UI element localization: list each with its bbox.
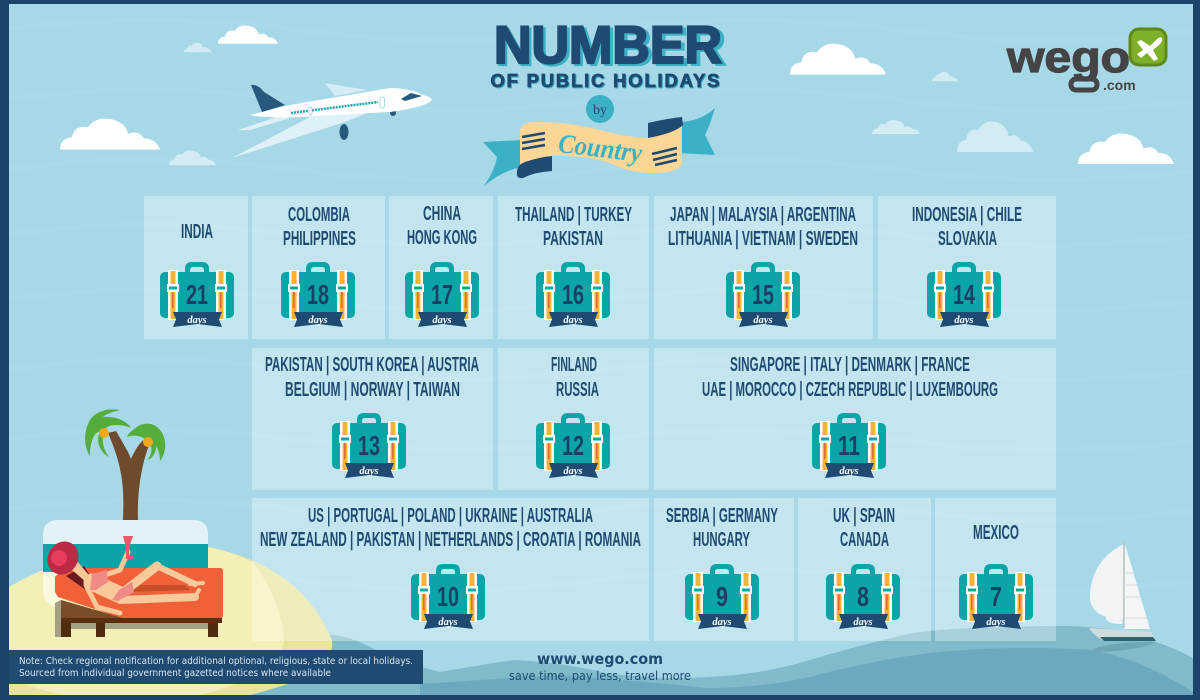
country labels: [181, 203, 1022, 551]
website and tagline: www.wego.com: [537, 650, 663, 668]
suitcase: 7 days: 7: [990, 581, 1002, 612]
note box: Sourced from individual government gazetted notices where available: [19, 668, 331, 679]
suitcase: 14 days: 14: [953, 279, 975, 310]
suitcase: 13 days: days: [359, 466, 379, 477]
country labels: INDIA: [181, 221, 213, 243]
suitcase: 13 days: 13: [358, 430, 380, 461]
country labels: NEW ZEALAND | PAKISTAN | NETHERLANDS | CROATIA | ROMANIA: [260, 529, 641, 551]
suitcase: 18 days: 18: [307, 279, 329, 310]
subtitle: of public holidays: OF PUBLIC HOLIDAYS: [490, 70, 720, 91]
suitcase: 13 days: [332, 413, 406, 478]
website and tagline: save time, pay less, travel more: [509, 668, 691, 683]
suitcase: 12 days: [536, 413, 610, 478]
wego logo: [1006, 29, 1166, 93]
airplane: [232, 83, 432, 158]
suitcase: 14 days: [927, 262, 1001, 327]
country labels: CANADA: [840, 529, 889, 551]
suitcase: 16 days: [536, 262, 610, 327]
palm tree: [85, 409, 165, 520]
suitcase: 18 days: [281, 262, 355, 327]
suitcase: 8 days: 8: [857, 581, 869, 612]
suitcase: 10 days: days: [438, 617, 458, 628]
country labels: US | PORTUGAL | POLAND | UKRAINE | AUSTRALIA: [308, 505, 593, 527]
suitcase: 14 days: days: [954, 315, 974, 326]
panels: [144, 196, 1056, 641]
country labels: JAPAN | MALAYSIA | ARGENTINA: [670, 204, 856, 226]
suitcase: 18 days: days: [308, 315, 328, 326]
suitcase: 16 days: days: [563, 315, 583, 326]
country labels: BELGIUM | NORWAY | TAIWAN: [285, 379, 460, 401]
country labels: PAKISTAN: [543, 228, 603, 250]
suitcase: 12 days: 12: [562, 430, 584, 461]
sunbather: [42, 536, 203, 613]
country labels: SERBIA | GERMANY: [666, 505, 778, 527]
suitcase: 9 days: [685, 564, 759, 629]
sea hills: [240, 626, 1193, 695]
suitcase: 17 days: [405, 262, 479, 327]
suitcase: 11 days: [812, 413, 886, 478]
suitcase: 9 days: days: [712, 617, 732, 628]
suitcase: 11 days: days: [839, 466, 859, 477]
country labels: HONG KONG: [407, 227, 477, 249]
sailboat: [1089, 542, 1156, 652]
country labels: MEXICO: [973, 522, 1019, 544]
suitcase: 17 days: 17: [431, 279, 453, 310]
suitcase: 11 days: 11: [838, 430, 860, 461]
clouds: [60, 26, 1174, 165]
country labels: CHINA: [423, 203, 461, 225]
suitcase: 8 days: days: [853, 617, 873, 628]
suitcase: 7 days: [959, 564, 1033, 629]
subtitle: of public holidays: OF PUBLIC HOLIDAYS: [492, 71, 720, 92]
country labels: LITHUANIA | VIETNAM | SWEDEN: [668, 228, 858, 250]
suitcase: 8 days: [826, 564, 900, 629]
wego logo: wego: [1006, 33, 1130, 82]
sun lounger: [55, 568, 223, 637]
suitcase: 10 days: [411, 564, 485, 629]
beach cabana backdrop: [43, 520, 208, 608]
by badge: by: [593, 103, 607, 118]
island: [9, 545, 332, 695]
country labels: RUSSIA: [556, 379, 599, 401]
title: NUMBER: NUMBER: [494, 16, 722, 75]
note box: [9, 650, 423, 684]
suitcase: 21 days: 21: [186, 279, 208, 310]
suitcase: 12 days: days: [563, 466, 583, 477]
suitcase: 9 days: 9: [716, 581, 728, 612]
country labels: INDONESIA | CHILE: [912, 204, 1022, 226]
country labels: THAILAND | TURKEY: [515, 204, 632, 226]
title: NUMBER: NUMBER: [496, 18, 726, 77]
note box: Note: Check regional notification for additional optional, religious, state or local holidays.: [19, 656, 413, 667]
country labels: HUNGARY: [693, 529, 750, 551]
country labels: PHILIPPINES: [283, 228, 356, 250]
suitcase: 15 days: 15: [752, 279, 774, 310]
by badge: [586, 95, 614, 123]
suitcase: 15 days: [726, 262, 800, 327]
suitcase: 21 days: days: [187, 315, 207, 326]
country labels: SINGAPORE | ITALY | DENMARK | FRANCE: [730, 354, 970, 376]
country labels: SLOVAKIA: [938, 228, 997, 250]
suitcase: 17 days: days: [432, 315, 452, 326]
suitcase: 21 days: [160, 262, 234, 327]
suitcase: 10 days: 10: [437, 581, 459, 612]
country labels: COLOMBIA: [288, 204, 350, 226]
suitcase: 15 days: days: [753, 315, 773, 326]
country labels: PAKISTAN | SOUTH KOREA | AUSTRIA: [265, 354, 479, 376]
suitcase: 7 days: days: [986, 617, 1006, 628]
country labels: UK | SPAIN: [833, 505, 895, 527]
website and tagline: [510, 656, 690, 682]
country ribbon: Country: [557, 128, 645, 168]
country ribbon: [483, 108, 715, 186]
suitcase: 16 days: 16: [562, 279, 584, 310]
wego logo: .com: [1103, 77, 1136, 93]
country labels: FINLAND: [551, 354, 597, 376]
